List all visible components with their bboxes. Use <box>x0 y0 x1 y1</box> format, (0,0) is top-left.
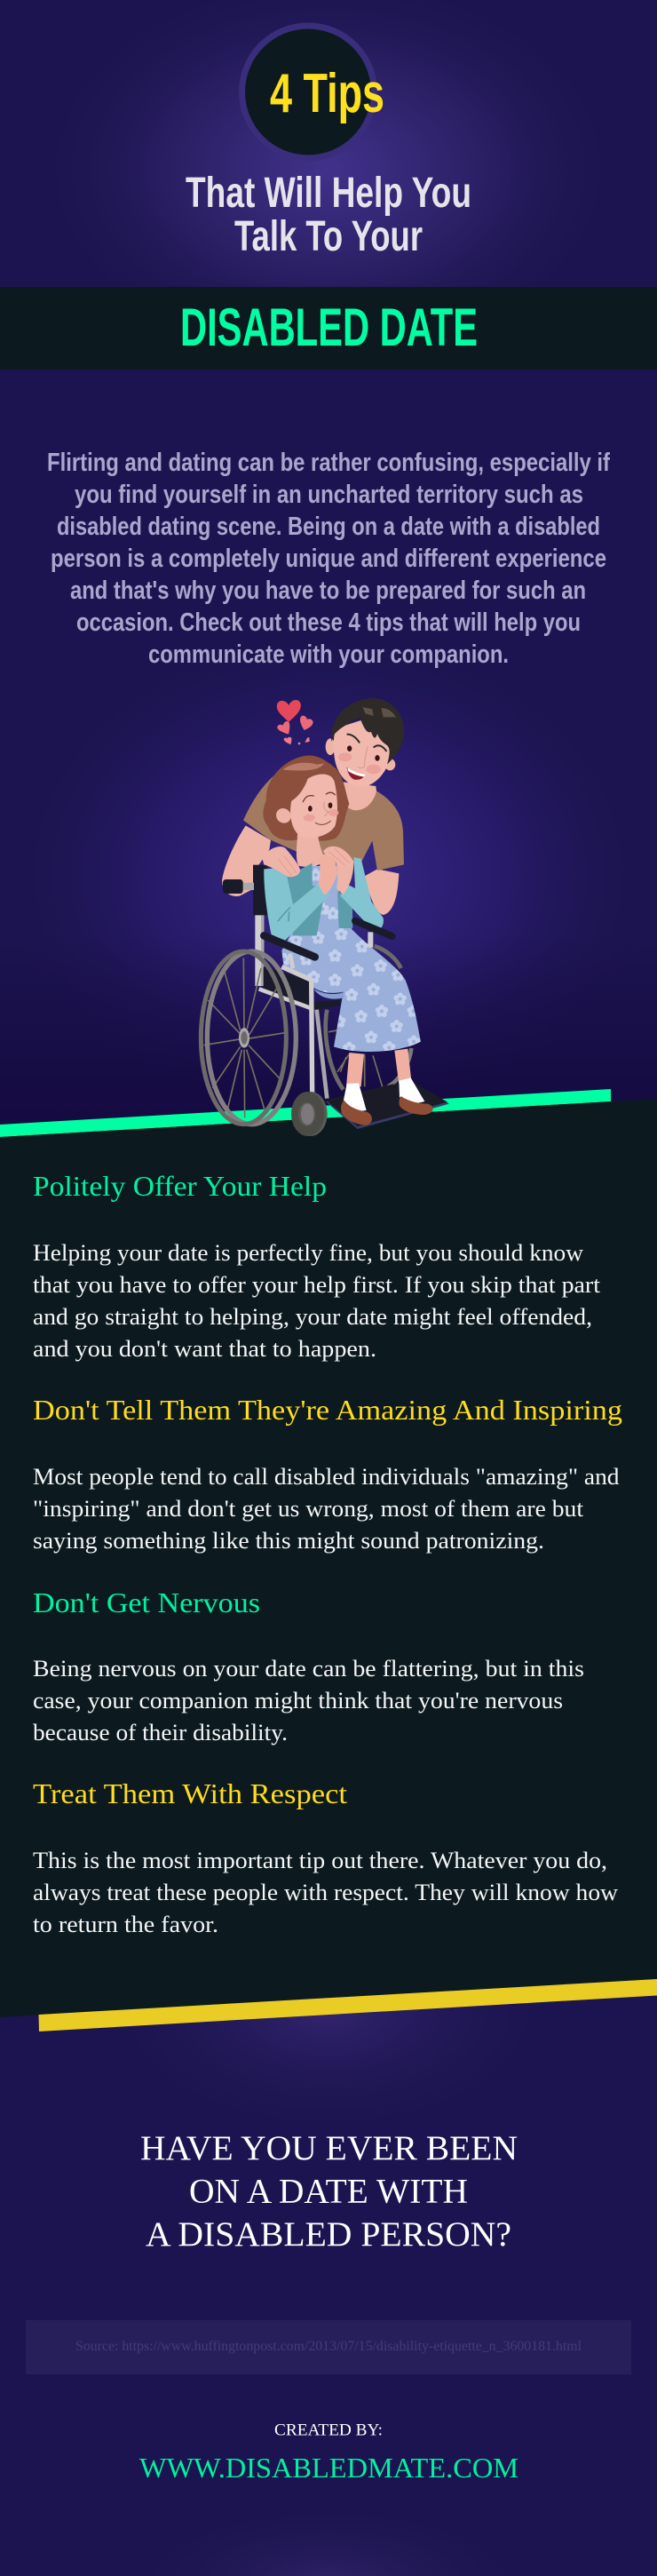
tip 1 body: Helping your date is perfectly fine, but you should know <box>33 1240 583 1266</box>
tip 2 body: "inspiring" and don't get us wrong, most of them are but <box>33 1496 584 1522</box>
man's left arm <box>222 825 271 896</box>
caster wheel <box>291 1092 328 1136</box>
wheelchair seat and frame <box>259 932 370 1099</box>
source box: Source: https://www.huffingtonpost.com/2013/07/15/disability-etiquette_n_3600181.html <box>75 2339 582 2354</box>
tip 4 body <box>33 1848 618 1937</box>
footrest <box>326 1083 449 1129</box>
tip 3 body <box>33 1656 584 1745</box>
woman's dress <box>278 866 421 1054</box>
title lines: That Will Help You <box>186 170 471 217</box>
tip 4 body: to return the favor. <box>33 1912 218 1937</box>
credit: CREATED BY: <box>274 2421 383 2439</box>
title band: disabled date <box>0 287 657 370</box>
tip 1 body <box>33 1240 601 1362</box>
title band: disabled date: DISABLED DATE <box>180 298 478 357</box>
title lines: Talk To Your <box>234 213 423 260</box>
closing question: A DISABLED PERSON? <box>146 2215 511 2254</box>
illustration: couple with wheelchair <box>201 698 449 1136</box>
intro paragraph <box>47 449 610 669</box>
back wheel <box>326 946 411 1090</box>
tip 4 body: This is the most important tip out there. Whatever you do, <box>33 1848 607 1873</box>
tip 3 body: case, your companion might think that you're nervous <box>33 1688 563 1713</box>
intro paragraph: communicate with your companion. <box>148 640 509 669</box>
tip 1 <box>33 1170 601 1362</box>
tip 2 body: Most people tend to call disabled individuals "amazing" and <box>33 1464 620 1490</box>
woman's cardigan <box>264 857 384 943</box>
source box <box>26 2320 631 2374</box>
man's right arm <box>364 869 399 915</box>
credit <box>139 2421 518 2484</box>
tip 3 <box>33 1586 584 1745</box>
tip 1 body: and go straight to helping, your date might feel offended, <box>33 1304 592 1330</box>
yellow accent bar <box>39 1979 657 2031</box>
closing question <box>140 2129 518 2254</box>
tip 4 <box>33 1777 618 1937</box>
title lines <box>186 170 471 260</box>
tip 4: Treat Them With Respect <box>33 1777 347 1809</box>
tip 2 <box>33 1394 622 1554</box>
closing question: ON A DATE WITH <box>189 2173 468 2210</box>
man's head <box>326 698 404 787</box>
woman's face <box>273 763 338 838</box>
icon: hearts <box>277 700 313 744</box>
closing question: HAVE YOU EVER BEEN <box>140 2129 518 2167</box>
header badge: 4 Tips <box>239 23 384 162</box>
tip 1 body: that you have to offer your help first. If you skip that part <box>33 1272 601 1298</box>
tip 3 body: Being nervous on your date can be flattering, but in this <box>33 1656 584 1682</box>
tip 2 body <box>33 1464 620 1554</box>
man's hand on shoulder <box>262 847 300 877</box>
man's neck <box>341 782 376 810</box>
wheelchair armrests <box>264 921 392 957</box>
large wheel <box>201 951 296 1125</box>
tip 3: Don't Get Nervous <box>33 1586 260 1618</box>
wheelchair backrest and handle <box>223 865 267 986</box>
woman's clasped hands <box>318 847 353 894</box>
tip 2: Don't Tell Them They're Amazing And Inspiring <box>33 1394 622 1426</box>
dark tips panel <box>0 1099 657 2017</box>
woman's legs and shoes <box>341 1049 433 1125</box>
tip 1 body: and you don't want that to happen. <box>33 1336 376 1362</box>
tip 1: Politely Offer Your Help <box>33 1170 327 1202</box>
man's shirt <box>243 775 404 871</box>
tip 3 body: because of their disability. <box>33 1720 288 1745</box>
tip 2 body: saying something like this might sound patronizing. <box>33 1528 544 1554</box>
woman's neck <box>297 833 326 868</box>
woman's hair back <box>263 755 349 841</box>
credit: WWW.DISABLEDMATE.COM <box>139 2452 518 2484</box>
green accent bar <box>0 1089 611 1137</box>
header badge: 4 Tips: 4 Tips <box>270 63 384 124</box>
tip 4 body: always treat these people with respect. They will know how <box>33 1880 618 1905</box>
